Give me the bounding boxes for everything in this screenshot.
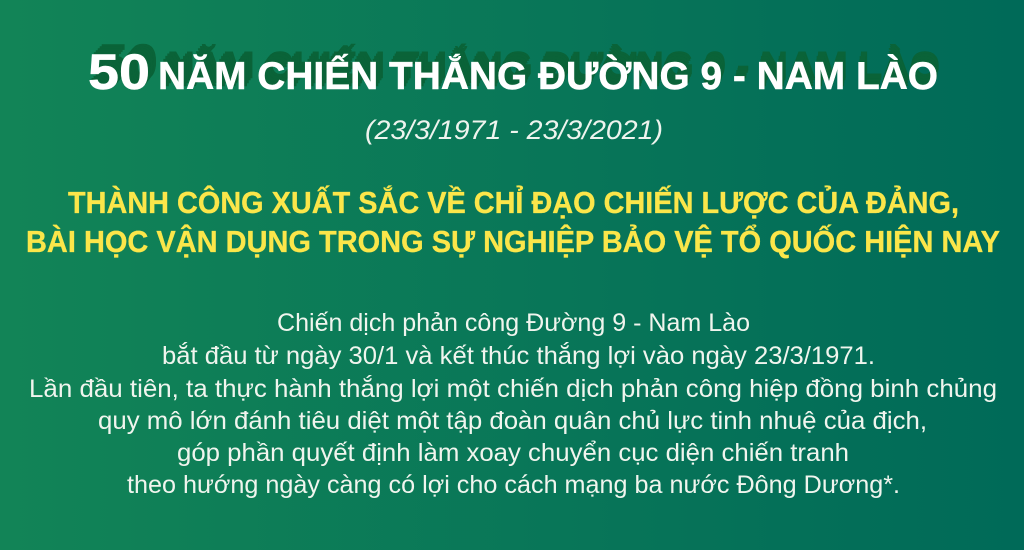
title shadow: 50 bbox=[98, 34, 158, 90]
title shadow: 50 bbox=[96, 36, 156, 92]
title shadow: NĂM CHIẾN THẮNG ĐƯỜNG 9 - NAM LÀO bbox=[161, 51, 939, 95]
title shadow: NĂM CHIẾN THẮNG ĐƯỜNG 9 - NAM LÀO bbox=[165, 45, 940, 89]
title shadow bbox=[90, 34, 940, 98]
body text: Lần đầu tiên, ta thực hành thắng lợi một chiến dịch phản công hiệp đồng binh chủng bbox=[29, 374, 997, 403]
subtitle bbox=[26, 184, 1000, 259]
title shadow: NĂM CHIẾN THẮNG ĐƯỜNG 9 - NAM LÀO bbox=[167, 43, 940, 87]
subtitle: THÀNH CÔNG XUẤT SẮC VỀ CHỈ ĐẠO CHIẾN LƯỢC CỦA ĐẢNG, bbox=[68, 184, 959, 220]
body text: quy mô lớn đánh tiêu diệt một tập đoàn quân chủ lực tinh nhuệ của địch, bbox=[98, 407, 927, 435]
body text: góp phần quyết định làm xoay chuyển cục diện chiến tranh bbox=[177, 439, 849, 467]
title: NĂM CHIẾN THẮNG ĐƯỜNG 9 - NAM LÀO bbox=[158, 54, 938, 98]
body text: Chiến dịch phản công Đường 9 - Nam Lào bbox=[277, 309, 750, 337]
body text: theo hướng ngày càng có lợi cho cách mạng ba nước Đông Dương*. bbox=[127, 471, 900, 499]
title shadow: 50 bbox=[92, 40, 153, 96]
date range: (23/3/1971 - 23/3/2021) bbox=[365, 115, 663, 145]
body text bbox=[29, 309, 997, 499]
title: 50 bbox=[88, 44, 150, 100]
body text: bắt đầu từ ngày 30/1 và kết thúc thắng lợi vào ngày 23/3/1971. bbox=[162, 341, 875, 370]
title shadow: 50 bbox=[94, 38, 155, 94]
title shadow: 50 bbox=[90, 42, 152, 98]
title shadow: NĂM CHIẾN THẮNG ĐƯỜNG 9 - NAM LÀO bbox=[163, 48, 939, 92]
